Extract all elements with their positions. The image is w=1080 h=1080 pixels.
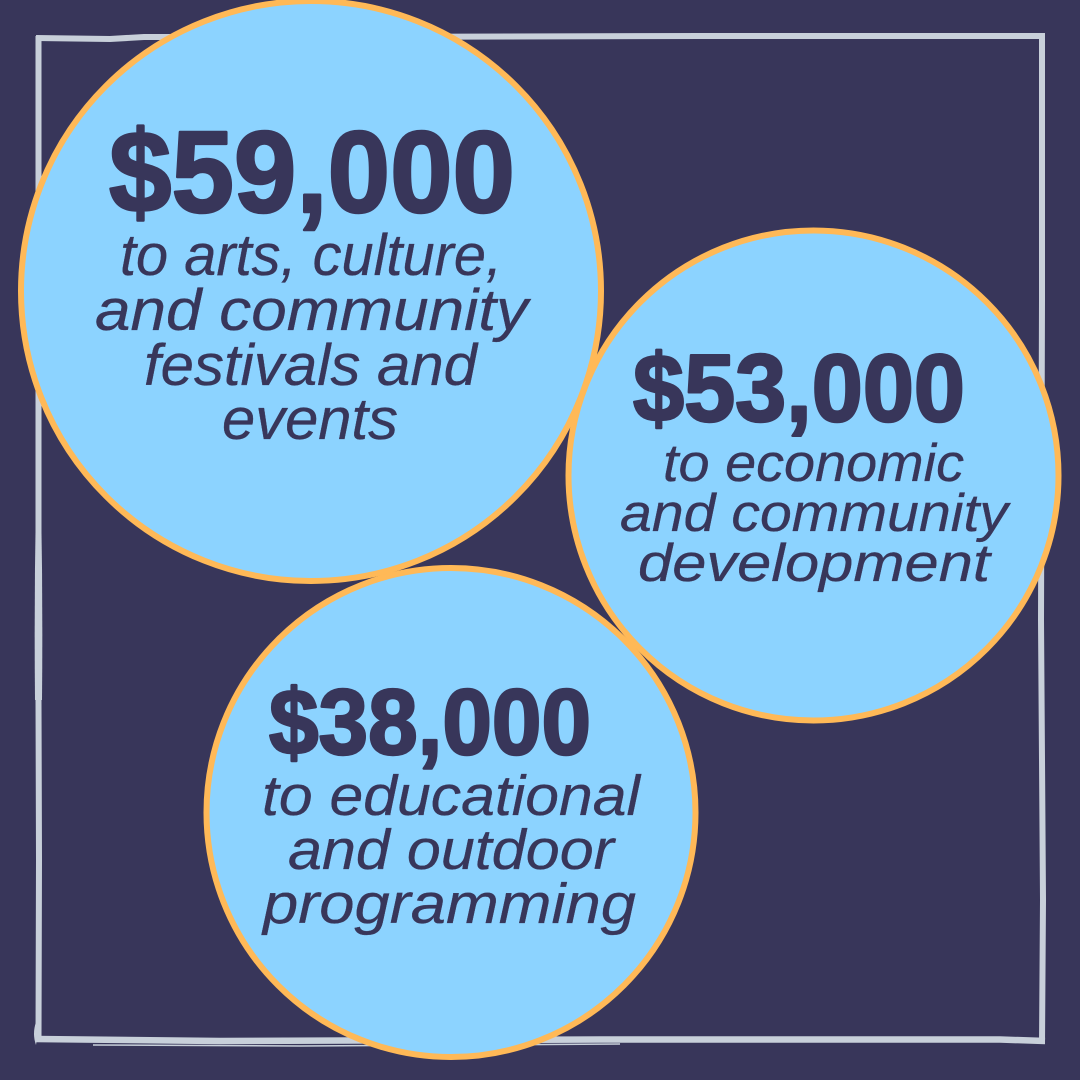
description text: events: [222, 387, 398, 452]
circle: economic and community development: [568, 230, 1058, 720]
description text: to arts, culture,: [120, 223, 502, 288]
amount: $59,000: $59,000: [109, 107, 515, 237]
description text: programming: [261, 872, 636, 936]
circle shape: [206, 568, 696, 1057]
amount: $38,000: $38,000: [269, 670, 591, 774]
description text: to economic: [663, 434, 964, 493]
description text: and community: [620, 484, 1012, 543]
circle: arts, culture and community: [21, 1, 601, 581]
description text: development: [638, 534, 993, 593]
description text: [620, 434, 1012, 593]
circle: educational and outdoor programming: [206, 568, 696, 1057]
description text: [95, 223, 531, 452]
circle shape: [21, 1, 601, 581]
description text: and community: [95, 278, 531, 343]
description text: to educational: [262, 764, 641, 828]
amount: $53,000: $53,000: [633, 335, 965, 442]
description text: [261, 764, 641, 936]
circle shape: [568, 230, 1058, 720]
description text: and outdoor: [288, 818, 616, 882]
description text: festivals and: [144, 333, 479, 398]
